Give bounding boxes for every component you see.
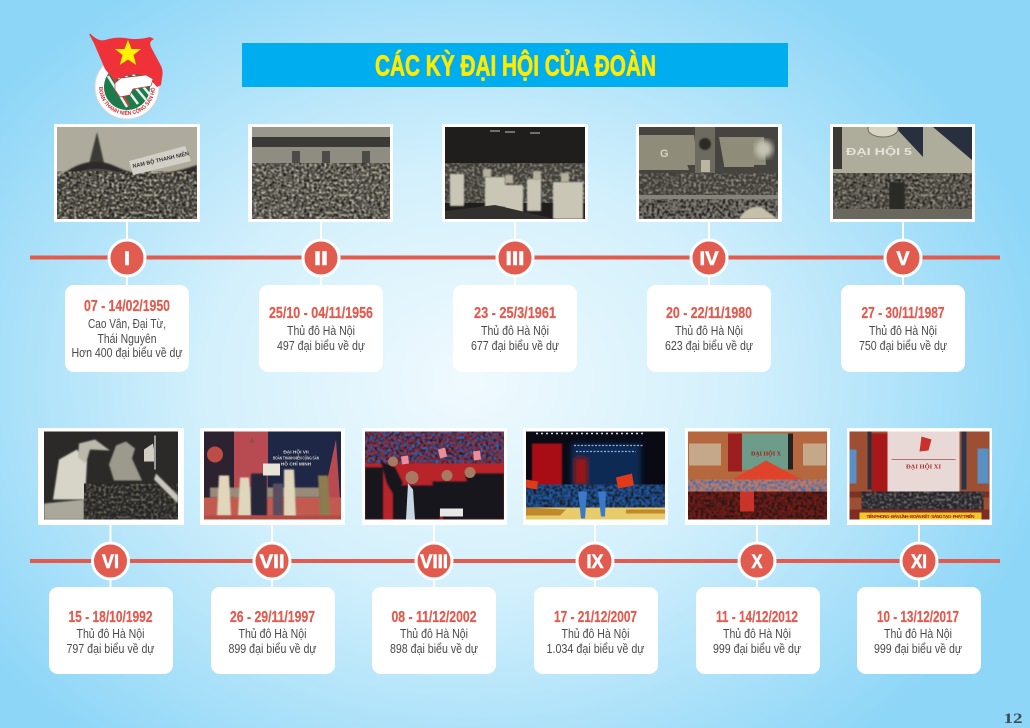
info card XI: Thủ đô Hà Nội [884, 626, 952, 641]
marker VII: VII [260, 552, 284, 573]
info card V: Thủ đô Hà Nội [869, 323, 937, 338]
marker IX [577, 543, 613, 579]
marker II: II [314, 249, 328, 270]
info card IX: 17 - 21/12/2007 [554, 609, 637, 626]
photo XI [847, 428, 992, 525]
photo III [442, 124, 588, 222]
info card VIII: 898 đại biểu về dự [390, 641, 478, 656]
info card XI: 999 đại biểu về dự [874, 641, 962, 656]
info card VII: 26 - 29/11/1997 [230, 609, 315, 626]
info card I: Hơn 400 đại biểu về dự [72, 345, 183, 360]
info card II: Thủ đô Hà Nội [287, 323, 355, 338]
marker IX: IX [586, 552, 604, 573]
marker X: X [752, 552, 763, 573]
marker VIII [416, 543, 452, 579]
info card IV: 623 đại biểu về dự [665, 338, 753, 353]
info card X: Thủ đô Hà Nội [723, 626, 791, 641]
marker VII [254, 543, 290, 579]
marker X [739, 543, 775, 579]
info card VIII: Thủ đô Hà Nội [400, 626, 468, 641]
stage sign: ĐẠI HỘI 5 [846, 145, 912, 158]
info card VII: 899 đại biểu về dự [228, 641, 317, 656]
stage backdrop text: ĐẠI HỘI X [751, 450, 782, 458]
photo IV: G [660, 148, 669, 160]
info card I: Cao Vân, Đại Từ, [88, 316, 166, 331]
info card IX: Thủ đô Hà Nội [562, 626, 630, 641]
logo pole and fist [90, 34, 129, 106]
info card III: Thủ đô Hà Nội [481, 323, 549, 338]
logo star [115, 40, 141, 65]
photo X [685, 428, 830, 525]
info card IV [647, 285, 771, 372]
info card VI: 797 đại biểu về dự [66, 641, 155, 656]
title: CÁC KỲ ĐẠI HỘI CỦA ĐOÀN [375, 48, 656, 82]
marker VI: VI [102, 552, 119, 573]
info card III: 23 - 25/3/1961 [474, 305, 556, 322]
marker V: V [896, 249, 910, 270]
marker XI [901, 543, 937, 579]
info card I [65, 285, 189, 372]
stage backdrop text: ĐẠI HỘI VII [283, 448, 309, 456]
marker III [497, 240, 533, 276]
marker IV: IV [700, 249, 719, 270]
marker V [885, 240, 921, 276]
info card VIII [372, 587, 496, 674]
photo IX [523, 428, 668, 525]
info card X [696, 587, 820, 674]
photo II [248, 124, 393, 222]
photo I [54, 124, 200, 222]
marker VIII: VIII [420, 552, 448, 573]
info card VI: 15 - 18/10/1992 [68, 609, 152, 626]
marker II [303, 240, 339, 276]
marker XI: XI [911, 552, 927, 573]
info card VI: Thủ đô Hà Nội [76, 626, 145, 641]
info card VII [211, 587, 335, 674]
title banner [242, 43, 788, 87]
stage banner text: TIÊN PHONG - BẢN LĨNH - ĐOÀN KẾT - SÁNG TẠO - PHÁT TRIỂN [867, 512, 974, 519]
marker III: III [506, 249, 524, 270]
info card V: 27 - 30/11/1987 [862, 305, 944, 322]
photo I: NAM BỘ THANH NIÊN [132, 149, 190, 170]
info card X: 999 đại biểu về dự [713, 641, 801, 656]
info card III [453, 285, 577, 372]
info card IX [534, 587, 658, 674]
logo flag [90, 34, 163, 87]
marker I [109, 240, 145, 276]
info card V [841, 285, 965, 372]
marker IV [691, 240, 727, 276]
info card V: 750 đại biểu về dự [859, 338, 947, 353]
photo VII [200, 428, 345, 525]
info card XI [857, 587, 981, 674]
info card II: 497 đại biểu về dự [277, 338, 365, 353]
photo VII: HỒ CHÍ MINH [281, 460, 312, 468]
info card II: 25/10 - 04/11/1956 [269, 305, 373, 322]
info card IX: 1.034 đại biểu về dự [546, 641, 645, 656]
info card I: 07 - 14/02/1950 [84, 298, 170, 315]
photo IV [636, 124, 782, 222]
info card IV: 20 - 22/11/1980 [666, 305, 752, 322]
marker VI [92, 543, 128, 579]
timeline row 1 [30, 222, 1000, 285]
info card II [259, 285, 383, 372]
info card VI [49, 587, 173, 674]
info card I: Thái Nguyên [98, 331, 156, 346]
marker I: I [124, 249, 130, 270]
photo VIII [362, 428, 507, 525]
info card VII: Thủ đô Hà Nội [238, 626, 307, 641]
info card X: 11 - 14/12/2012 [716, 609, 798, 626]
photo V [830, 121, 975, 222]
page number: 12 [1004, 711, 1022, 727]
info card III: 677 đại biểu về dự [471, 338, 559, 353]
info card VIII: 08 - 11/12/2002 [392, 609, 476, 626]
info card XI: 10 - 13/12/2017 [877, 609, 959, 626]
photo VI [38, 428, 184, 525]
stage backdrop text: ĐẠI HỘI XI [906, 462, 941, 470]
logo [89, 34, 163, 120]
timeline row 2 [30, 525, 1000, 587]
info card IV: Thủ đô Hà Nội [675, 323, 743, 338]
